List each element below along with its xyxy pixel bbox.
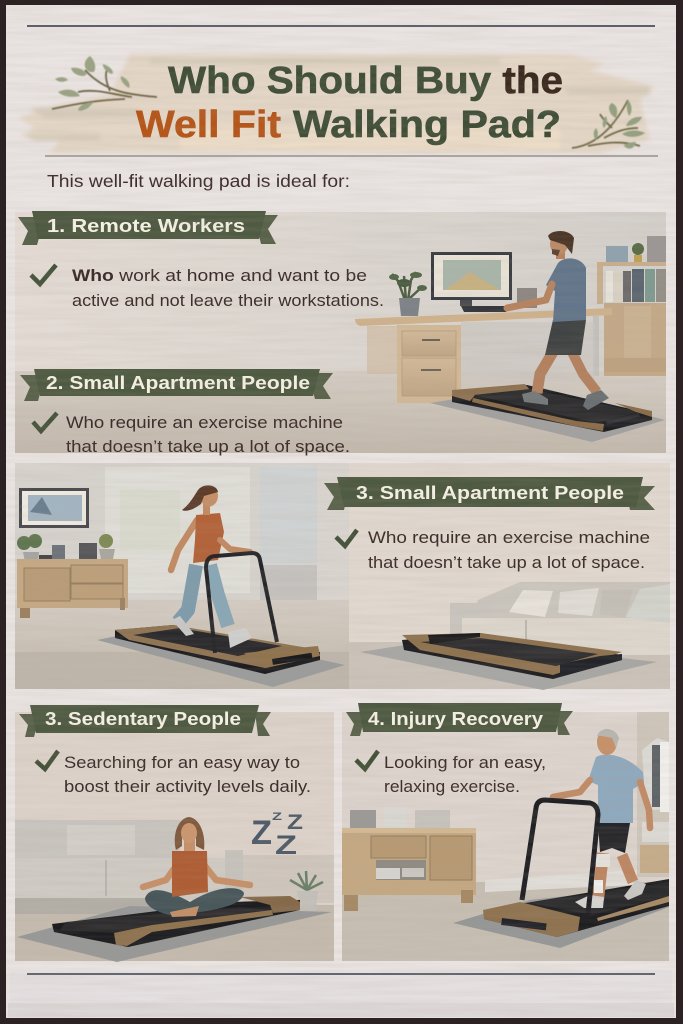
title text: Who Should Buy the <box>168 60 563 102</box>
title text <box>136 60 563 146</box>
icon: right leafy branch <box>572 100 645 149</box>
icon: check mark <box>33 413 57 431</box>
panel: small space living room <box>324 463 670 690</box>
icon: sleeping z letters: Z <box>251 814 272 852</box>
icon: office plant <box>389 272 427 316</box>
intro text: This well-fit walking pad is ideal for: <box>47 171 350 191</box>
ribbon: injury recovery: 4. Injury Recovery <box>368 709 543 729</box>
text: remote workers <box>72 266 384 310</box>
desk <box>355 308 612 403</box>
treadmill <box>52 896 300 947</box>
text: sedentary people: boost their activity levels daily. <box>64 777 311 796</box>
woman walking <box>171 485 252 648</box>
rug <box>453 885 669 948</box>
rug <box>430 386 665 442</box>
ribbon: sedentary people: 3. Sedentary People <box>45 709 241 729</box>
icon: sleeping z letters: Z <box>275 830 297 860</box>
wall, sofa and floor <box>15 712 334 961</box>
panel: sedentary people <box>15 705 334 962</box>
ribbon: sedentary people <box>19 705 271 737</box>
icon: check mark <box>36 751 58 769</box>
icon: sleeping z letters: Z <box>272 811 282 823</box>
wall and floor <box>15 212 666 453</box>
icon: check mark <box>336 530 357 546</box>
icon: potted plant <box>290 871 323 911</box>
treadmill <box>452 384 652 432</box>
text: injury recovery: relaxing exercise. <box>384 777 520 796</box>
icon: sleeping z letters <box>251 811 303 860</box>
computer monitor <box>431 252 537 312</box>
wall and floor <box>15 463 349 689</box>
title text: Walking Pad? <box>293 104 561 146</box>
text: sedentary people: Searching for an easy way to <box>64 753 300 772</box>
title banner <box>18 54 658 157</box>
sideboard <box>342 807 476 911</box>
bottom rule <box>27 973 655 975</box>
text: remote workers: active and not leave their workstations. <box>72 291 384 310</box>
icon: left leafy branch <box>52 56 157 111</box>
rug <box>360 638 657 690</box>
top rule <box>27 25 655 27</box>
treadmill handlebar <box>206 553 277 653</box>
icon: sleeping z letters: Z <box>287 811 303 834</box>
man walking with knee wrap <box>553 729 650 908</box>
rug <box>97 626 345 687</box>
text: small apartment people: that doesn’t take up a lot of space. <box>368 553 645 572</box>
ribbon: small apartment people <box>20 369 333 401</box>
text: small apartment people: Who require an exercise machine <box>66 413 343 432</box>
panel: woman walking in living room <box>15 463 349 689</box>
painted brush band <box>18 54 655 153</box>
shelf and cabinet <box>597 236 666 376</box>
closet with clothes <box>637 712 669 877</box>
framed picture <box>19 488 89 528</box>
treadmill <box>483 879 669 937</box>
icon: check mark <box>31 265 56 284</box>
rug <box>17 906 332 962</box>
ribbon: remote workers: 1. Remote Workers <box>47 216 245 236</box>
text: small apartment people: that doesn’t take up a lot of space. <box>66 437 350 456</box>
text: remote workers: Who work at home and want to be <box>72 266 367 285</box>
treadmill handlebar <box>522 800 598 914</box>
icon: check mark <box>356 751 378 769</box>
text: small apartment people <box>368 528 650 572</box>
text: small apartment people: Who require an exercise machine <box>368 528 650 547</box>
ribbon: remote workers <box>18 211 278 245</box>
wall, sofa and floor <box>349 463 670 689</box>
ribbon: small apartment people: 2. Small Apartment People <box>46 373 310 393</box>
ribbon: small apartment people: 3. Small Apartment People <box>356 483 624 503</box>
text: small apartment people <box>66 413 350 456</box>
wall and floor <box>342 712 669 961</box>
text: injury recovery: Looking for an easy, <box>384 753 546 772</box>
text: injury recovery <box>384 753 546 796</box>
panel: injury recovery <box>342 703 669 961</box>
treadmill <box>402 633 622 679</box>
sideboard with plants <box>17 534 128 618</box>
text: sedentary people <box>64 753 311 796</box>
ribbon: injury recovery <box>346 703 573 736</box>
man walking at desk <box>507 231 609 410</box>
woman meditating <box>143 817 250 917</box>
panel: remote workers <box>15 211 666 456</box>
treadmill <box>115 625 320 674</box>
title text: Well Fit <box>136 104 281 146</box>
ribbon: small apartment people <box>324 477 655 510</box>
